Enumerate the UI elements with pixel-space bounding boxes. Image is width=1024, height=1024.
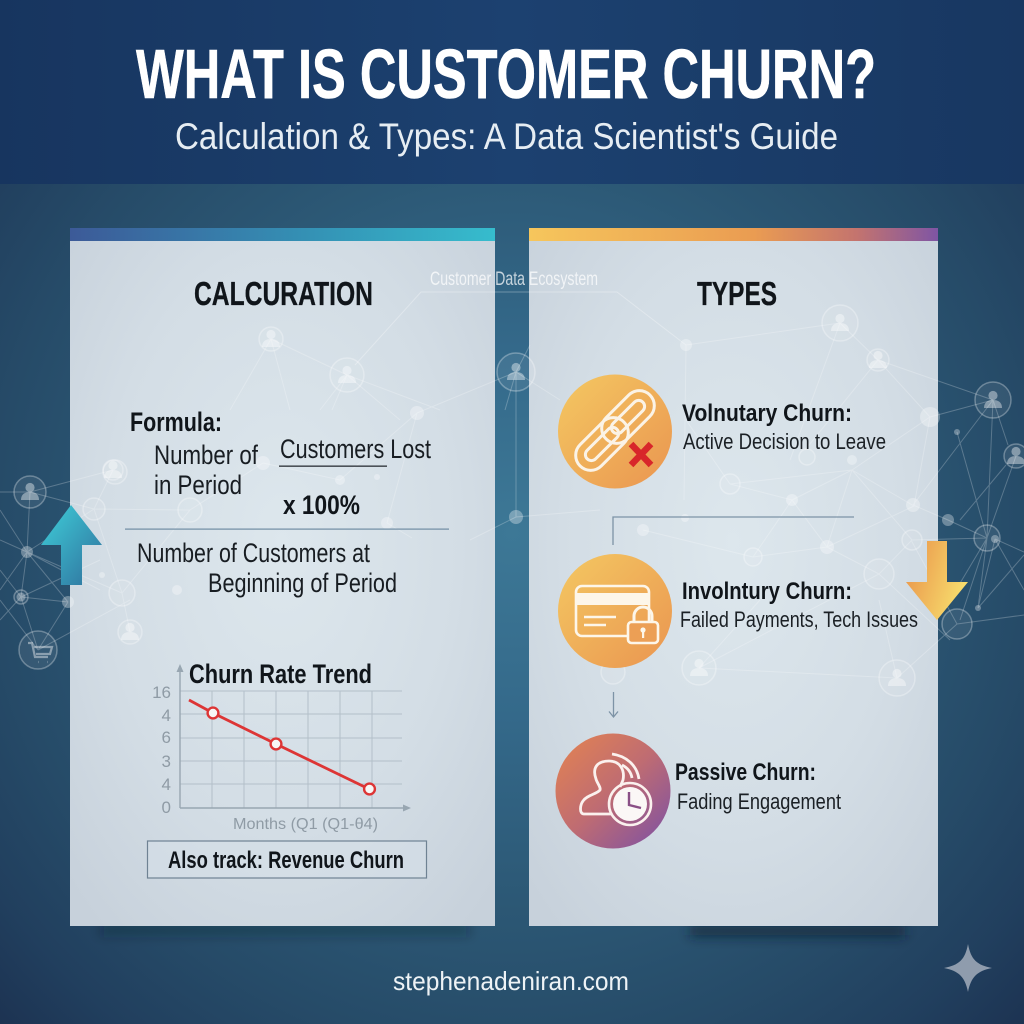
icon: shopping cart [28, 643, 52, 662]
heading: types: TYPES [697, 275, 777, 312]
callout: revenue churn [148, 841, 426, 878]
arrow: teal up arrow [41, 505, 102, 585]
icon: involuntary churn card and lock [558, 554, 672, 668]
header band [0, 0, 1024, 184]
subtitle: Calculation & Types: A Data Scientist's Guide [175, 116, 838, 157]
chart: churn rate trend: 4 [162, 775, 171, 794]
icon: voluntary churn broken link [558, 374, 672, 488]
network caption: Customer Data Ecosystem [430, 269, 598, 290]
chart: churn rate trend: 6 [162, 728, 171, 747]
formula [125, 407, 449, 598]
text: involuntary churn [680, 578, 918, 632]
chart: churn rate trend: 3 [162, 752, 171, 771]
formula: in Period [154, 470, 242, 500]
formula: Number of [154, 440, 258, 470]
text: passive churn: Fading Engagement [677, 789, 841, 814]
formula: Number of Customers at [137, 538, 370, 568]
chart: churn rate trend: 16 [152, 683, 171, 702]
arrow: small down arrow [609, 692, 618, 717]
panel accent bar: types [529, 228, 938, 241]
chart: churn rate trend: 4 [162, 706, 171, 725]
panel: calculation background [70, 228, 495, 926]
network caption [355, 269, 686, 365]
chart: churn rate trend [152, 659, 411, 833]
formula: Customers Lost [280, 434, 431, 464]
text: involuntary churn: Involntury Churn: [682, 578, 852, 605]
arrow: orange down arrow [906, 541, 968, 620]
text: voluntary churn [682, 400, 886, 454]
formula: x 100% [283, 490, 360, 520]
connector: elbow line [613, 517, 854, 545]
chart: churn rate trend: Months (Q1 (Q1-θ4) [233, 816, 378, 833]
heading: calculation: CALCURATION [194, 275, 373, 312]
chart: churn rate trend: Churn Rate Trend [189, 659, 372, 689]
text: passive churn [675, 759, 841, 814]
chart: churn rate trend: 0 [162, 798, 171, 817]
text: involuntary churn: Failed Payments, Tech Issues [680, 607, 918, 632]
footer website: stephenadeniran.com [393, 966, 629, 996]
icon: sparkle [944, 944, 992, 992]
callout: revenue churn: Also track: Revenue Churn [168, 847, 404, 874]
icon: passive churn fading user and clock [556, 734, 670, 848]
panel: types background [529, 228, 938, 926]
customer data network [0, 305, 1024, 696]
text: passive churn: Passive Churn: [675, 759, 816, 786]
formula: Beginning of Period [208, 568, 397, 598]
formula: Formula: [130, 407, 222, 437]
text: voluntary churn: Active Decision to Leave [683, 429, 886, 454]
panel accent bar: calculation [70, 228, 495, 241]
panel drop shadows [100, 926, 905, 936]
text: voluntary churn: Volnutary Churn: [682, 400, 852, 427]
